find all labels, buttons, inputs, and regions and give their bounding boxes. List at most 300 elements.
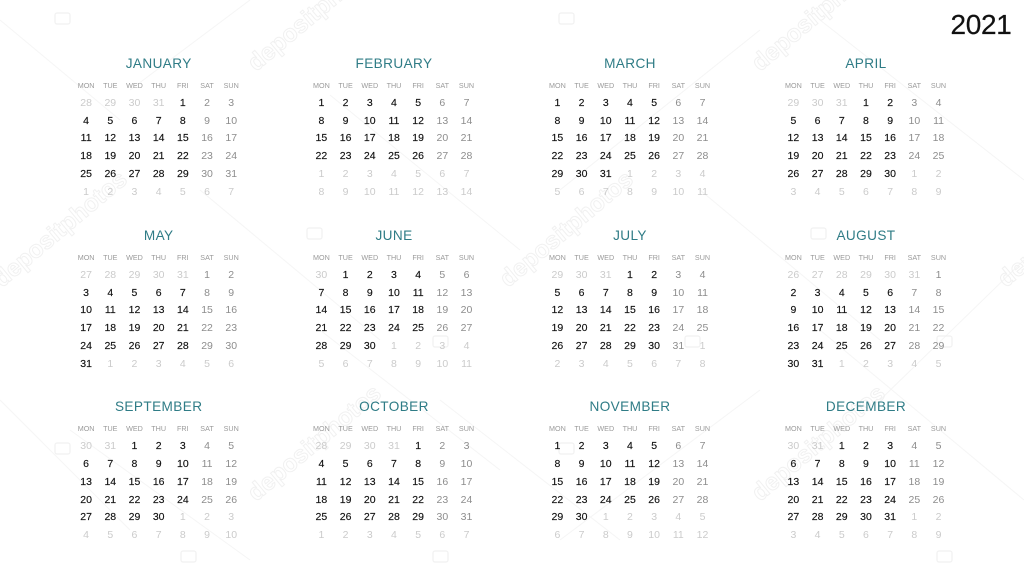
- weekday header: TUE: [574, 81, 589, 90]
- day grid: 4: [700, 269, 705, 281]
- day grid: 2: [887, 97, 893, 109]
- panel: January: [78, 56, 239, 198]
- day grid: 10: [884, 458, 896, 470]
- day grid: 11: [624, 458, 635, 470]
- day grid: 4: [911, 440, 917, 452]
- day grid: 1: [391, 340, 397, 352]
- day grid: 11: [461, 358, 472, 370]
- weekday header: MON: [78, 253, 94, 262]
- weekday header: SAT: [908, 424, 921, 433]
- day grid: 4: [83, 115, 89, 127]
- day grid: 25: [933, 150, 944, 162]
- day grid: 1: [839, 358, 845, 370]
- day grid: 12: [648, 458, 660, 470]
- day grid: 6: [790, 458, 796, 470]
- weekday header: MON: [78, 81, 94, 90]
- day grid: 27: [153, 340, 164, 352]
- day grid: 27: [812, 269, 823, 281]
- day grid: 6: [204, 186, 210, 198]
- weekday header: THU: [387, 424, 401, 433]
- day grid: 1: [700, 340, 705, 352]
- day grid: 1: [318, 168, 324, 180]
- day grid: 8: [415, 458, 421, 470]
- weekday header: TUE: [103, 81, 117, 90]
- day grid: 8: [700, 358, 705, 370]
- day grid: 23: [201, 150, 213, 162]
- day grid: 24: [225, 150, 237, 162]
- day grid: 6: [863, 186, 869, 198]
- weekday header: THU: [387, 81, 401, 90]
- day grid: 22: [552, 150, 563, 162]
- day grid: 5: [415, 529, 421, 541]
- day grid: 28: [153, 168, 164, 180]
- weekday header: WED: [361, 253, 378, 262]
- day grid: 29: [860, 168, 872, 180]
- day grid: 3: [367, 529, 373, 541]
- day grid: 14: [697, 458, 708, 470]
- day grid: 10: [177, 458, 189, 470]
- weekday header: SUN: [459, 424, 474, 433]
- day grid: 29: [412, 511, 424, 523]
- day grid: 11: [388, 115, 399, 127]
- month title: FEBRUARY: [356, 56, 432, 71]
- day grid: 10: [600, 115, 612, 127]
- day grid: 6: [579, 186, 584, 198]
- day grid: 29: [104, 97, 116, 109]
- day grid: 27: [576, 340, 587, 352]
- day grid: 16: [340, 132, 351, 144]
- weekday header: SAT: [672, 253, 685, 262]
- day grid: 30: [576, 269, 587, 281]
- day grid: 10: [672, 287, 684, 299]
- weekday header: THU: [859, 81, 873, 90]
- day grid: 13: [436, 115, 448, 127]
- month title: SEPTEMBER: [115, 399, 202, 414]
- day grid: 11: [697, 186, 708, 198]
- day grid: 20: [576, 322, 587, 334]
- day grid: 23: [648, 322, 660, 334]
- day grid: 23: [860, 494, 872, 506]
- weekday header: SUN: [931, 253, 946, 262]
- day grid: 1: [911, 168, 917, 180]
- day grid: 1: [911, 511, 917, 523]
- day grid: 10: [388, 287, 400, 299]
- day grid: 10: [225, 529, 237, 541]
- day grid: 12: [788, 132, 799, 144]
- day grid: 19: [129, 322, 140, 334]
- day grid: 16: [884, 132, 896, 144]
- day grid: 30: [884, 269, 896, 281]
- day grid: 3: [815, 287, 820, 299]
- day grid: 24: [884, 494, 896, 506]
- weekday header: SAT: [436, 424, 449, 433]
- day grid: 14: [388, 476, 400, 488]
- day grid: 19: [412, 132, 424, 144]
- month title: AUGUST: [836, 228, 896, 243]
- day grid: 19: [933, 476, 944, 488]
- panel: December: [785, 399, 946, 541]
- day grid: 13: [80, 476, 92, 488]
- day grid: 11: [388, 186, 399, 198]
- day grid: 26: [436, 322, 448, 334]
- day grid: 17: [908, 132, 920, 144]
- day grid: 27: [812, 168, 823, 180]
- day grid: 5: [180, 186, 186, 198]
- day grid: 5: [439, 269, 445, 281]
- day grid: 30: [153, 511, 164, 523]
- day grid: 20: [436, 132, 448, 144]
- weekday header: THU: [623, 253, 637, 262]
- day grid: 5: [415, 168, 421, 180]
- weekday header: WED: [833, 81, 850, 90]
- day grid: 4: [627, 440, 633, 452]
- day grid: 10: [812, 304, 823, 316]
- weekday header: SUN: [695, 424, 710, 433]
- day grid: 9: [863, 458, 869, 470]
- day grid: 4: [675, 511, 681, 523]
- day grid: 18: [80, 150, 92, 162]
- day grid: 31: [153, 97, 164, 109]
- day grid: 26: [648, 494, 660, 506]
- watermark background: depositphotos: [747, 380, 891, 507]
- day grid: 1: [318, 529, 324, 541]
- day grid: 21: [908, 322, 920, 334]
- day grid: 1: [839, 440, 845, 452]
- day grid: 16: [788, 322, 799, 334]
- day grid: 15: [836, 476, 848, 488]
- day grid: 1: [863, 97, 869, 109]
- month title: MAY: [144, 228, 174, 243]
- day grid: 13: [812, 132, 823, 144]
- day grid: 1: [204, 269, 210, 281]
- day grid: 16: [201, 132, 213, 144]
- day grid: 6: [675, 440, 681, 452]
- weekday header: TUE: [103, 424, 117, 433]
- weekday header: SUN: [695, 81, 710, 90]
- day grid: 28: [316, 340, 327, 352]
- day grid: 12: [552, 304, 563, 316]
- day grid: 27: [364, 511, 376, 523]
- day grid: 9: [936, 529, 941, 541]
- day grid: 7: [156, 529, 162, 541]
- panel: February: [313, 56, 474, 198]
- day grid: 30: [316, 269, 327, 281]
- day grid: 10: [364, 115, 376, 127]
- day grid: 6: [439, 168, 445, 180]
- day grid: 1: [83, 186, 89, 198]
- day grid: 3: [464, 440, 469, 452]
- weekday header: WED: [597, 81, 614, 90]
- day grid: 31: [600, 168, 612, 180]
- day grid: 28: [908, 340, 920, 352]
- day grid: 1: [554, 97, 560, 109]
- day grid: 17: [364, 132, 376, 144]
- weekday header: SAT: [672, 424, 685, 433]
- day grid: 11: [202, 458, 212, 470]
- day grid: 5: [204, 358, 210, 370]
- weekday header: SUN: [459, 81, 474, 90]
- day grid: 27: [672, 494, 684, 506]
- day grid: 16: [364, 304, 376, 316]
- day grid: 7: [156, 115, 162, 127]
- day grid: 14: [908, 304, 920, 316]
- day grid: 31: [600, 269, 612, 281]
- day grid: 6: [887, 287, 893, 299]
- weekday header: SAT: [200, 253, 214, 262]
- day grid: 8: [627, 186, 633, 198]
- weekday header: SAT: [200, 424, 214, 433]
- day grid: 8: [391, 358, 397, 370]
- day grid: 4: [839, 287, 845, 299]
- weekday header: TUE: [810, 81, 825, 90]
- day grid: 23: [884, 150, 896, 162]
- day grid: 3: [367, 168, 373, 180]
- weekday header: SUN: [459, 253, 474, 262]
- day grid: 7: [603, 186, 609, 198]
- day grid: 13: [153, 304, 164, 316]
- day grid: 26: [129, 340, 140, 352]
- day grid: 24: [461, 494, 472, 506]
- day grid: 5: [554, 287, 560, 299]
- day grid: 28: [104, 269, 116, 281]
- day grid: 28: [461, 150, 472, 162]
- day grid: 3: [790, 186, 796, 198]
- day grid: 17: [461, 476, 472, 488]
- day grid: 25: [80, 168, 92, 180]
- weekday header: WED: [126, 253, 143, 262]
- day grid: 7: [464, 97, 469, 109]
- day grid: 27: [884, 340, 896, 352]
- day grid: 2: [579, 440, 584, 452]
- month title: JULY: [613, 228, 647, 243]
- weekday header: [313, 253, 474, 262]
- day grid: 5: [107, 115, 113, 127]
- day grid: 15: [860, 132, 872, 144]
- weekday header: WED: [361, 81, 378, 90]
- weekday header: TUE: [338, 253, 353, 262]
- day grid: 2: [790, 287, 796, 299]
- weekday header: THU: [151, 424, 166, 433]
- day grid: 7: [228, 186, 234, 198]
- day grid: 21: [388, 494, 400, 506]
- day grid: 26: [104, 168, 116, 180]
- day grid: 23: [788, 340, 799, 352]
- day grid: 2: [343, 168, 348, 180]
- day grid: 31: [225, 168, 237, 180]
- day grid: 9: [228, 287, 234, 299]
- day grid: 23: [225, 322, 237, 334]
- day grid: 18: [836, 322, 848, 334]
- day grid: 29: [201, 340, 213, 352]
- day grid: 6: [228, 358, 234, 370]
- day grid: 1: [180, 97, 186, 109]
- day grid: 6: [83, 458, 89, 470]
- day grid: 5: [839, 529, 845, 541]
- weekday header: WED: [833, 253, 850, 262]
- day grid: 29: [552, 168, 563, 180]
- day grid: 10: [600, 458, 612, 470]
- day grid: 26: [648, 150, 660, 162]
- day grid: 7: [887, 186, 893, 198]
- weekday header: SUN: [931, 81, 946, 90]
- day grid: 27: [461, 322, 472, 334]
- day grid: 8: [180, 115, 186, 127]
- weekday header: [78, 81, 239, 90]
- day grid: 7: [911, 287, 917, 299]
- weekday header: MON: [549, 81, 566, 90]
- day grid: 30: [576, 511, 587, 523]
- day grid: 31: [388, 440, 400, 452]
- weekday header: SUN: [695, 253, 710, 262]
- day grid: 20: [672, 476, 684, 488]
- panel: April: [785, 56, 946, 198]
- day grid: 26: [412, 150, 424, 162]
- day grid: 17: [600, 476, 612, 488]
- day grid: 6: [579, 287, 584, 299]
- day grid: 7: [887, 529, 893, 541]
- day grid: 27: [80, 269, 92, 281]
- day grid: 5: [936, 440, 941, 452]
- day grid: 19: [436, 304, 448, 316]
- day grid: 18: [908, 476, 920, 488]
- day grid: 25: [836, 340, 848, 352]
- day grid: 1: [343, 269, 348, 281]
- weekday header: THU: [859, 253, 873, 262]
- day grid: 8: [132, 458, 137, 470]
- weekday header: [549, 253, 710, 262]
- day grid: 23: [364, 322, 376, 334]
- day grid: 24: [600, 150, 612, 162]
- day grid: 30: [201, 168, 213, 180]
- day grid: 12: [104, 132, 116, 144]
- day grid: 8: [911, 186, 917, 198]
- weekday header: MON: [313, 424, 330, 433]
- day grid: 30: [812, 97, 823, 109]
- day grid: 24: [600, 494, 612, 506]
- day grid: 22: [340, 322, 351, 334]
- weekday header: FRI: [884, 424, 896, 433]
- day grid: 19: [648, 132, 660, 144]
- day grid: 1: [554, 440, 560, 452]
- day grid: 9: [343, 115, 348, 127]
- day grid: 20: [812, 150, 823, 162]
- day grid: 4: [83, 529, 89, 541]
- day grid: 2: [936, 168, 941, 180]
- day grid: 2: [343, 529, 348, 541]
- day grid: 13: [672, 115, 684, 127]
- day grid: 30: [648, 340, 660, 352]
- day grid: 23: [153, 494, 164, 506]
- day grid: 23: [576, 150, 587, 162]
- day grid: 22: [316, 150, 327, 162]
- day grid: 7: [700, 440, 705, 452]
- day grid: 12: [860, 304, 872, 316]
- day grid: 16: [860, 476, 872, 488]
- day grid: 11: [413, 287, 424, 299]
- day grid: 30: [436, 511, 448, 523]
- day grid: 18: [388, 132, 400, 144]
- month title: MARCH: [604, 56, 656, 71]
- day grid: 13: [788, 476, 799, 488]
- day grid: 3: [180, 440, 186, 452]
- day grid: [316, 440, 472, 541]
- day grid: 18: [933, 132, 944, 144]
- day grid: 3: [156, 358, 162, 370]
- day grid: 14: [461, 115, 472, 127]
- day grid: 31: [812, 440, 823, 452]
- day grid: 10: [364, 186, 376, 198]
- day grid: 19: [648, 476, 660, 488]
- day grid: 5: [415, 97, 421, 109]
- day grid: 9: [579, 115, 584, 127]
- day grid: 22: [933, 322, 944, 334]
- day grid: 7: [700, 97, 705, 109]
- day grid: 28: [836, 168, 848, 180]
- day grid: 4: [700, 168, 705, 180]
- day grid: 16: [576, 132, 587, 144]
- day grid: 23: [576, 494, 587, 506]
- day grid: 25: [624, 494, 636, 506]
- day grid: 28: [388, 511, 400, 523]
- day grid: 4: [815, 529, 820, 541]
- day grid: 29: [624, 340, 636, 352]
- day grid: 20: [884, 322, 896, 334]
- day grid: 25: [624, 150, 636, 162]
- weekday header: SUN: [224, 424, 239, 433]
- day grid: 7: [675, 358, 681, 370]
- day grid: 29: [933, 340, 944, 352]
- day grid: 3: [367, 97, 373, 109]
- weekday header: WED: [597, 424, 614, 433]
- day grid: 31: [836, 97, 848, 109]
- weekday header: WED: [597, 253, 614, 262]
- day grid: 21: [697, 476, 708, 488]
- day grid: 19: [104, 150, 116, 162]
- day grid: 18: [697, 304, 708, 316]
- day grid: 1: [180, 511, 186, 523]
- day grid: 9: [204, 115, 210, 127]
- day grid: 22: [552, 494, 563, 506]
- day grid: 6: [439, 97, 445, 109]
- day grid: [788, 440, 944, 541]
- day grid: 9: [415, 358, 421, 370]
- day grid: 27: [80, 511, 92, 523]
- day grid: 23: [436, 494, 448, 506]
- day grid: 29: [552, 269, 563, 281]
- day grid: 3: [83, 287, 89, 299]
- weekday header: SAT: [436, 81, 449, 90]
- day grid: 4: [627, 97, 633, 109]
- day grid: 2: [156, 440, 162, 452]
- day grid: 9: [651, 186, 657, 198]
- day grid: 30: [80, 440, 92, 452]
- weekday header: [785, 253, 946, 262]
- day grid: 15: [412, 476, 424, 488]
- day grid: 3: [887, 440, 893, 452]
- day grid: 31: [104, 440, 116, 452]
- day grid: 6: [675, 97, 681, 109]
- day grid: 8: [936, 287, 941, 299]
- panel: May: [78, 228, 239, 370]
- day grid: 25: [201, 494, 213, 506]
- day grid: 10: [461, 458, 472, 470]
- weekday header: MON: [549, 253, 566, 262]
- day grid: 7: [464, 529, 469, 541]
- day grid: 4: [204, 440, 210, 452]
- day grid: 3: [603, 440, 609, 452]
- day grid: 13: [884, 304, 896, 316]
- day grid: 2: [415, 340, 421, 352]
